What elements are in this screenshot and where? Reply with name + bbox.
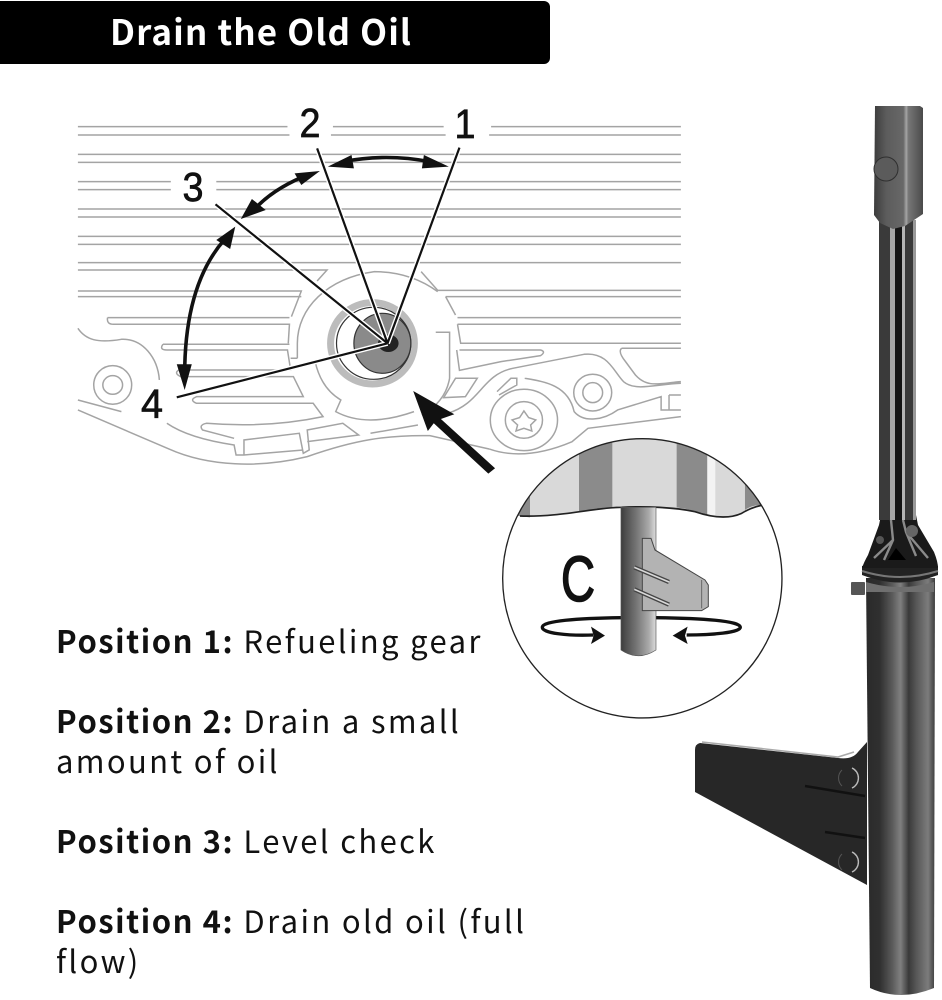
drain plug (331, 303, 414, 384)
shaft (879, 220, 916, 520)
position numbers: 3 (182, 164, 204, 210)
text: position 1: Position 1: Refueling gear (56, 617, 483, 662)
head (874, 106, 923, 229)
casing band (530, 439, 758, 516)
label C: C (561, 543, 595, 615)
position numbers: 2 (300, 100, 320, 146)
text: position 4: flow) (56, 937, 141, 982)
text: position 2 (56, 697, 461, 782)
position numbers: 1 (454, 101, 476, 147)
inset: selector detail C (495, 430, 795, 718)
housing line drawing (78, 127, 681, 464)
text: position 4: Position 4: Drain old oil (full (56, 897, 526, 942)
double arrows between positions (177, 155, 449, 390)
rotation arrow back (542, 618, 740, 635)
text: position 2: amount of oil (56, 737, 280, 782)
shaft (621, 507, 656, 656)
tool handle (695, 742, 867, 885)
black pointer arrow (413, 391, 495, 474)
tool: T-handle key (695, 106, 938, 995)
position numbers: 4 (141, 381, 163, 427)
text: position 2: Position 2: Drain a small (56, 697, 461, 742)
text: position 4 (56, 897, 526, 982)
text: position 3: Position 3: Level check (56, 817, 437, 862)
position numbers (141, 100, 476, 427)
fin (642, 538, 708, 611)
gearbox diagram (78, 100, 681, 474)
title banner (0, 1, 550, 64)
collar (862, 561, 938, 582)
position pointer lines (177, 148, 459, 397)
title banner: Drain the Old Oil (110, 5, 412, 56)
side nub (851, 582, 865, 595)
cage (862, 515, 938, 568)
tube body (866, 578, 935, 995)
